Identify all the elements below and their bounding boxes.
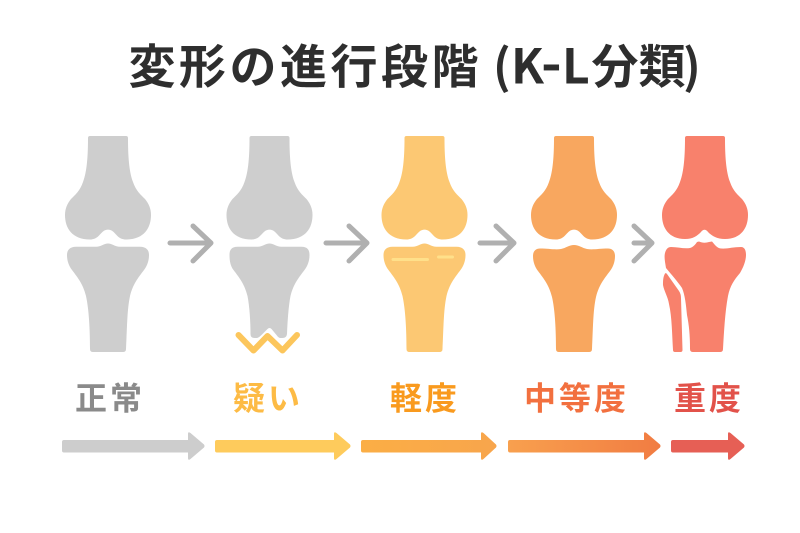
femur bbox=[662, 136, 748, 239]
progress arrow: moderate bbox=[508, 432, 660, 460]
title: ) bbox=[683, 28, 701, 98]
stage 4: moderate knee joint bbox=[531, 136, 617, 352]
label: normal: 正常 bbox=[75, 374, 145, 420]
label: suspected: 疑い bbox=[233, 374, 303, 420]
tibia with bone spurs bbox=[665, 242, 746, 352]
title: - bbox=[541, 20, 562, 100]
arrow: moderate to severe bbox=[634, 226, 652, 261]
femur bbox=[226, 136, 312, 240]
title: K bbox=[511, 28, 545, 98]
femur bbox=[65, 136, 151, 240]
progress arrow: suspected bbox=[215, 432, 350, 460]
arrow: suspected to mild bbox=[326, 226, 367, 261]
title: ( bbox=[493, 28, 511, 98]
stage 1: normal knee joint bbox=[65, 136, 151, 352]
tibia with worn base bbox=[230, 244, 310, 338]
joint space narrowing marks bbox=[393, 257, 452, 260]
label: mild: 軽度 bbox=[390, 374, 460, 420]
tibia bbox=[67, 244, 149, 352]
progress arrow: mild bbox=[361, 432, 496, 460]
progress arrow: normal bbox=[62, 432, 204, 460]
tibia bbox=[384, 244, 466, 352]
femur bbox=[531, 136, 617, 240]
detached fibula fragment bbox=[663, 273, 682, 352]
femur bbox=[382, 136, 468, 240]
progress arrow: severe bbox=[671, 432, 744, 460]
label: moderate: 中等度 bbox=[524, 374, 629, 420]
title: L bbox=[562, 28, 590, 98]
arrow: mild to moderate bbox=[480, 226, 514, 261]
stage 5: severe knee joint bbox=[662, 136, 748, 352]
stage 2: suspected knee joint bbox=[226, 136, 312, 338]
title: 変形の進行段階 bbox=[128, 28, 478, 98]
stage 3: mild knee joint bbox=[382, 136, 468, 352]
title: 分類 bbox=[592, 28, 686, 98]
arrow: normal to suspected bbox=[170, 226, 211, 261]
label: severe: 重度 bbox=[674, 374, 744, 420]
icon: early wear zigzag bbox=[238, 335, 297, 350]
tibia bbox=[533, 245, 615, 352]
